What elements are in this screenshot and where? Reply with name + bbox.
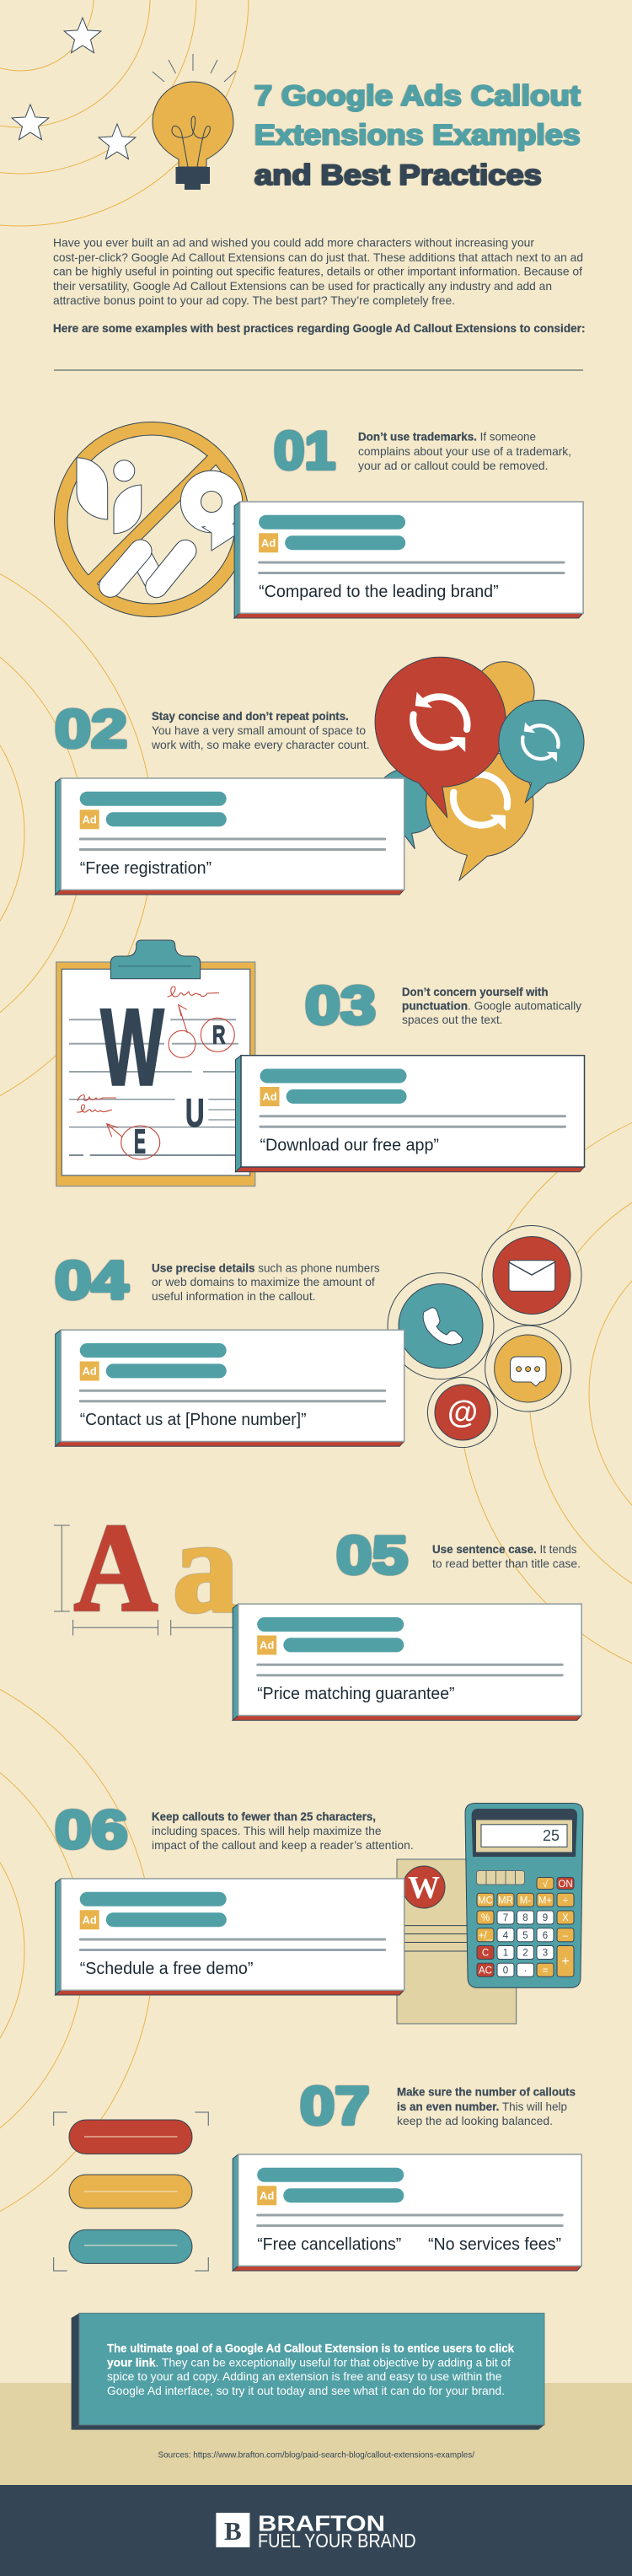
tip 07 text: Make sure the number of callouts bbox=[397, 2085, 576, 2099]
illustration: contact icons bbox=[388, 1226, 581, 1448]
footer logo bbox=[216, 2511, 416, 2552]
icon: lower yellow bubble bbox=[426, 750, 533, 880]
conclusion box: spice to your ad copy. Adding an extension is free and easy to use within the bbox=[107, 2369, 502, 2383]
sources: Sources: https://www.brafton.com/blog/paid-search-blog/callout-extensions-examples/ bbox=[158, 2450, 474, 2460]
illustration: stacked callout pills with brackets bbox=[54, 2112, 208, 2271]
number 03: 03 bbox=[305, 976, 376, 1035]
ad card 02: Ad bbox=[83, 813, 97, 826]
calculator key labels: MC bbox=[478, 1896, 493, 1906]
tip 03 text bbox=[402, 985, 581, 1026]
icon: location pin bbox=[180, 471, 243, 551]
illustration: clipboard with proofreading marks bbox=[56, 940, 255, 1186]
calculator key labels: 3 bbox=[543, 1948, 548, 1958]
calculator key labels: √ bbox=[543, 1879, 549, 1890]
letters R U E: E bbox=[134, 1122, 146, 1161]
tip 04 text bbox=[152, 1261, 380, 1303]
tip 07 text bbox=[397, 2085, 576, 2127]
tip 04 text: or web domains to maximize the amount of bbox=[152, 1275, 375, 1288]
calculator key labels: 5 bbox=[522, 1931, 528, 1941]
tip 06 text bbox=[152, 1810, 414, 1852]
tip 05 text: to read better than title case. bbox=[432, 1557, 581, 1570]
letters R U E bbox=[134, 1020, 226, 1161]
ad card 02: “Free registration” bbox=[80, 858, 212, 878]
intro text: Have you ever built an ad and wished you could add more characters without increasing your bbox=[53, 236, 534, 250]
icon: three stars bbox=[12, 18, 136, 159]
tip 03 text: Don’t concern yourself with bbox=[402, 985, 548, 998]
ad card 04: “Contact us at [Phone number]” bbox=[80, 1410, 307, 1429]
icon: upper yellow bubble bbox=[474, 662, 534, 729]
intro text: attractive bonus point to your ad copy. The best part? They’re completely free. bbox=[53, 293, 455, 307]
icon: phone bbox=[388, 1273, 494, 1379]
calculator key labels: AC bbox=[479, 1966, 492, 1976]
icon: red bubble bbox=[375, 657, 506, 817]
tip 07 text: is an even number. This will help bbox=[397, 2100, 567, 2113]
ad card 01: “Compared to the leading brand” bbox=[259, 582, 499, 601]
number 02: 02 bbox=[55, 700, 127, 759]
tip 07 text: keep the ad looking balanced. bbox=[397, 2114, 553, 2127]
calculator key labels: 2 bbox=[522, 1948, 528, 1958]
red proofreading marks bbox=[77, 987, 234, 1159]
calculator key labels: · bbox=[524, 1966, 527, 1976]
ad card 03: Ad bbox=[262, 1090, 277, 1103]
icon: chat bubble bbox=[485, 1326, 571, 1412]
ad card 06 bbox=[56, 1879, 404, 1995]
calculator key labels: M- bbox=[520, 1896, 531, 1906]
calculator key labels: C bbox=[482, 1948, 489, 1958]
ad card 01 bbox=[234, 502, 583, 618]
icon: teal right bubble bbox=[499, 700, 584, 803]
large W letter: W bbox=[101, 987, 164, 1108]
tip 03 text: punctuation. Google automatically bbox=[402, 998, 581, 1012]
footer logo: BRAFTON bbox=[258, 2511, 385, 2536]
number 04: 04 bbox=[55, 1251, 128, 1310]
intro text: cost-per-click? Google Ad Callout Extensions can do just that. These additions that attach next to an ad bbox=[53, 250, 583, 264]
calculator key labels: ÷ bbox=[563, 1896, 568, 1906]
calculator key labels: 9 bbox=[543, 1913, 548, 1923]
illustration: calculator bbox=[465, 1803, 583, 1987]
illustration: letter paper with W badge bbox=[397, 1859, 517, 2024]
title: Extensions Examples bbox=[254, 120, 581, 152]
icon: teal bubble behind card bbox=[374, 769, 442, 849]
intro text: Here are some examples with best practices regarding Google Ad Callout Extensions to consider: bbox=[53, 321, 585, 335]
illustration: Aa letters with dimension lines: A bbox=[74, 1498, 158, 1638]
calculator key labels: 0 bbox=[503, 1966, 508, 1976]
ad card 06: “Schedule a free demo” bbox=[80, 1959, 254, 1978]
tip 01 text: your ad or callout could be removed. bbox=[358, 459, 548, 472]
number 01: 01 bbox=[274, 422, 335, 481]
conclusion box: The ultimate goal of a Google Ad Callout Extension is to entice users to click bbox=[107, 2342, 514, 2355]
conclusion box: Google Ad interface, so try it out today and see what it can do for your brand. bbox=[107, 2384, 505, 2397]
calculator key labels: MR bbox=[498, 1896, 513, 1906]
intro text: can be highly useful in pointing out specific features, details or other important information. Because of bbox=[53, 265, 582, 278]
footer logo: B bbox=[224, 2516, 242, 2546]
tip 05 text bbox=[432, 1542, 581, 1570]
tip 02 text: You have a very small amount of space to bbox=[152, 723, 366, 737]
calculator key labels: 6 bbox=[543, 1931, 548, 1941]
icon: clip bbox=[110, 940, 201, 979]
illustration: Aa letters with dimension lines bbox=[54, 1492, 238, 1639]
illustration: Aa letters with dimension lines: a bbox=[173, 1492, 238, 1639]
ad card 05 bbox=[233, 1604, 581, 1720]
calculator key labels: % bbox=[481, 1913, 490, 1923]
tip 04 text: Use precise details such as phone numbers bbox=[152, 1261, 380, 1274]
calculator key labels: 1 bbox=[503, 1948, 508, 1958]
ad card 07: “No services fees” bbox=[428, 2235, 561, 2254]
icon: at sign: @ bbox=[447, 1395, 478, 1429]
calculator key labels: +/_ bbox=[479, 1931, 493, 1941]
tip 04 text: useful information in the callout. bbox=[152, 1289, 315, 1303]
icon: W badge: W bbox=[408, 1870, 440, 1906]
calculator key labels: 4 bbox=[503, 1931, 509, 1941]
ad card 07: Ad bbox=[260, 2189, 274, 2202]
icon: white leaf shapes bbox=[77, 458, 142, 534]
ad card 05: “Price matching guarantee” bbox=[257, 1684, 455, 1703]
tip 06 text: Keep callouts to fewer than 25 characters, bbox=[152, 1810, 376, 1823]
number 07: 07 bbox=[300, 2077, 370, 2136]
calculator key labels: 7 bbox=[503, 1913, 508, 1923]
tip 03 text: spaces out the text. bbox=[402, 1013, 502, 1026]
tip 01 text bbox=[358, 430, 571, 472]
calculator key labels: + bbox=[561, 1955, 570, 1969]
ad card 05: Ad bbox=[260, 1639, 274, 1652]
title: and Best Practices bbox=[254, 159, 542, 191]
illustration: speech bubbles with refresh arrows bbox=[374, 657, 584, 880]
tip 06 text: impact of the callout and keep a reader’s attention. bbox=[152, 1838, 414, 1852]
ad card 04 bbox=[56, 1330, 404, 1446]
icon: W badge bbox=[403, 1866, 445, 1908]
footer band bbox=[0, 2485, 632, 2576]
letters R U E: R bbox=[212, 1020, 226, 1050]
footer logo: FUEL YOUR BRAND bbox=[258, 2530, 416, 2552]
intro text bbox=[53, 236, 585, 335]
ad card 04: Ad bbox=[83, 1365, 97, 1378]
calculator key labels: = bbox=[543, 1966, 549, 1976]
title: 7 Google Ads Callout bbox=[254, 80, 581, 112]
ad card 02 bbox=[56, 778, 404, 895]
icon: envelope bbox=[482, 1226, 581, 1326]
ad card 03: “Download our free app” bbox=[260, 1136, 439, 1155]
calculator keys bbox=[477, 1877, 574, 1976]
title bbox=[254, 80, 581, 191]
tip 02 text: work with, so make every character count. bbox=[151, 738, 370, 751]
tip 01 text: complains about your use of a trademark, bbox=[358, 444, 571, 458]
number 05: 05 bbox=[336, 1526, 408, 1585]
calculator key labels: – bbox=[563, 1931, 569, 1941]
ad card 07 bbox=[233, 2154, 581, 2271]
intro text: their versatility, Google Ad Callout Extensions can be used for practically any industry and add an bbox=[53, 279, 552, 293]
calculator key labels: ON bbox=[558, 1880, 573, 1890]
tip 02 text bbox=[151, 709, 370, 751]
letters R U E: U bbox=[185, 1091, 204, 1136]
icon: ads logo bars bbox=[110, 548, 185, 588]
calculator key labels bbox=[478, 1879, 573, 1976]
calculator key labels: M+ bbox=[538, 1896, 552, 1906]
tip 01 text: Don’t use trademarks. If someone bbox=[358, 430, 536, 444]
tip 05 text: Use sentence case. It tends bbox=[432, 1542, 576, 1556]
number 06: 06 bbox=[55, 1801, 128, 1860]
ad card 06: Ad bbox=[83, 1914, 97, 1926]
conclusion box bbox=[72, 2313, 544, 2430]
ad card 03 bbox=[236, 1056, 585, 1172]
calculator key labels: 8 bbox=[522, 1913, 528, 1923]
tip 02 text: Stay concise and don’t repeat points. bbox=[152, 709, 349, 723]
tip 06 text: including spaces. This will help maximize the bbox=[152, 1824, 382, 1837]
illustration: no trademarks sign bbox=[54, 422, 249, 617]
ad card 01: Ad bbox=[261, 536, 276, 550]
conclusion box: your link. They can be exceptionally useful for that objective by adding a bit of bbox=[107, 2355, 511, 2369]
ad card 07: “Free cancellations” bbox=[257, 2235, 401, 2254]
calculator key labels: X bbox=[562, 1913, 569, 1923]
calculator display value: 25 bbox=[543, 1827, 560, 1844]
icon: light bulb bbox=[153, 54, 236, 190]
icon: at sign bbox=[427, 1377, 498, 1448]
